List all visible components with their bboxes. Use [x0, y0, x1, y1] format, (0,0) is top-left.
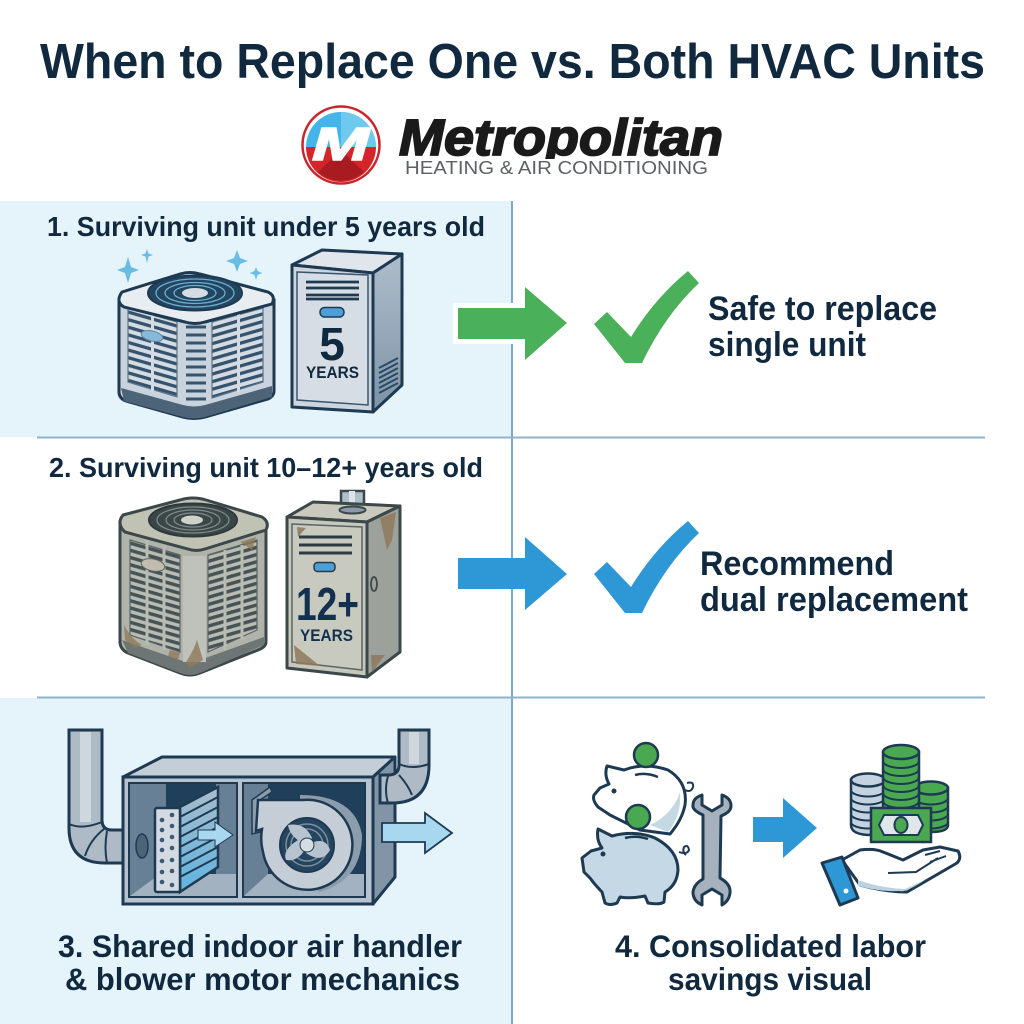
panel 3 caption	[58, 928, 462, 997]
panel 1: surviving unit under 5 years	[47, 211, 937, 418]
filter coil	[155, 787, 218, 892]
result text: safe to replace: Safe to replace	[708, 290, 937, 328]
result text: safe to replace	[708, 290, 937, 364]
icon: lower piggy bank	[582, 805, 689, 904]
furnace number 5: 5	[319, 318, 345, 370]
panel 3: shared air handler	[58, 730, 462, 997]
panel 1 heading: 1. Surviving unit under 5 years old	[47, 211, 485, 242]
logo badge	[302, 106, 380, 184]
icon: coin stacks and bill	[851, 745, 948, 842]
icon: upper piggy bank	[594, 743, 693, 834]
icon: air handler cabinet	[123, 757, 395, 904]
furnace years label: YEARS	[306, 364, 359, 382]
arrow: savings	[753, 798, 817, 858]
panel 4: consolidated labor savings	[582, 743, 960, 997]
furnace number 12+: 12+	[296, 578, 359, 630]
logo: Metropolitan	[302, 106, 728, 184]
icon: old condenser unit	[120, 498, 267, 675]
title: When to Replace One vs. Both HVAC Units	[40, 35, 985, 89]
icon: wrench	[693, 795, 731, 905]
icon: right duct	[380, 730, 429, 803]
panel 3 caption: 3. Shared indoor air handler	[58, 928, 462, 964]
centre green coin stack	[883, 745, 919, 812]
result text: recommend dual replacement: dual replacement	[700, 581, 968, 619]
icon: new condenser unit	[119, 272, 274, 418]
icon: blower housing and fan	[252, 787, 362, 892]
furnace years label: YEARS	[300, 627, 353, 645]
panel 2: surviving unit 10-12+ years	[49, 452, 968, 677]
icon: new furnace 5 years	[292, 250, 402, 412]
grey coin stack	[851, 774, 885, 835]
right compartment	[243, 783, 365, 897]
logo tagline: HEATING & AIR CONDITIONING	[405, 158, 708, 178]
icon: old furnace 12+ years	[287, 491, 400, 677]
arrow: airflow through coil	[198, 822, 233, 847]
result text: recommend dual replacement	[700, 545, 968, 619]
panel 4 caption: savings visual	[668, 961, 872, 997]
icon: left duct	[69, 730, 123, 863]
icon: sparkles	[117, 249, 262, 283]
panel backgrounds	[0, 201, 985, 1024]
right green coin stack	[914, 782, 948, 832]
panel 4 caption: 4. Consolidated labor	[615, 928, 926, 964]
icon: blue check mark	[594, 521, 699, 613]
arrow: supply air out	[382, 813, 452, 853]
flue pipe	[341, 491, 364, 509]
icon: green check mark	[594, 271, 699, 363]
panel 4 caption	[615, 928, 926, 997]
arrow: green	[453, 287, 567, 360]
logo badge: M	[312, 118, 371, 170]
left compartment	[129, 783, 237, 897]
result text: recommend dual replacement: Recommend	[700, 545, 894, 583]
logo wordmark: Metropolitan	[399, 109, 723, 166]
result text: safe to replace: single unit	[708, 326, 866, 364]
banknote	[871, 808, 931, 842]
arrow: blue	[458, 537, 567, 610]
icon: open hand	[822, 847, 960, 905]
panel 2 heading: 2. Surviving unit 10–12+ years old	[49, 452, 483, 483]
panel 3 caption: & blower motor mechanics	[65, 961, 460, 997]
